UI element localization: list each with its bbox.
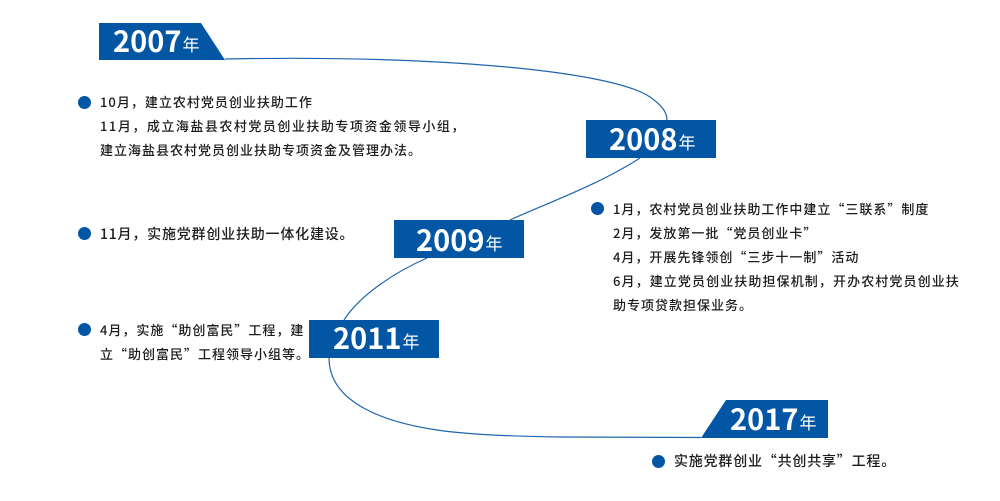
year label: 2017: 2017年	[730, 397, 816, 439]
text: 2007 events	[78, 92, 466, 159]
badge: 2008	[586, 120, 716, 158]
text: 2008 events: 2月，发放第一批“党员创业卡”	[613, 223, 817, 242]
text: 2008 events: 4月，开展先锋领创“三步十一制”活动	[613, 247, 859, 266]
year label: 2011: 2011年	[333, 316, 419, 358]
text: 2008 events: 6月，建立党员创业扶助担保机制，开办农村党员创业扶	[613, 271, 960, 290]
text: 2008 events: 助专项贷款担保业务。	[613, 295, 753, 314]
text: 2017 events: 实施党群创业“共创共享”工程。	[674, 451, 896, 471]
text: 2011 events: 立“助创富民”工程领导小组等。	[100, 344, 310, 363]
year label: 2008: 2008年	[609, 117, 695, 159]
text: 2009 events: 11月，实施党群创业扶助一体化建设。	[100, 224, 354, 244]
badge: 2009	[394, 220, 524, 258]
text: 2011 events	[78, 320, 310, 363]
text: 2011 events: 4月，实施“助创富民”工程，建	[100, 320, 304, 339]
text: 2007 events: 建立海盐县农村党员创业扶助专项资金及管理办法。	[100, 140, 422, 159]
text: 2007 events: 11月，成立海盐县农村党员创业扶助专项资金领导小组，	[100, 116, 466, 135]
text: 2008 events: 1月，农村党员创业扶助工作中建立“三联系”制度	[613, 199, 929, 218]
year label: 2009: 2009年	[416, 218, 502, 260]
badge: 2011	[309, 320, 439, 358]
text: 2007 events: 10月，建立农村党员创业扶助工作	[100, 92, 313, 111]
year label: 2007: 2007年	[113, 19, 199, 61]
text: 2008 events	[591, 199, 960, 314]
